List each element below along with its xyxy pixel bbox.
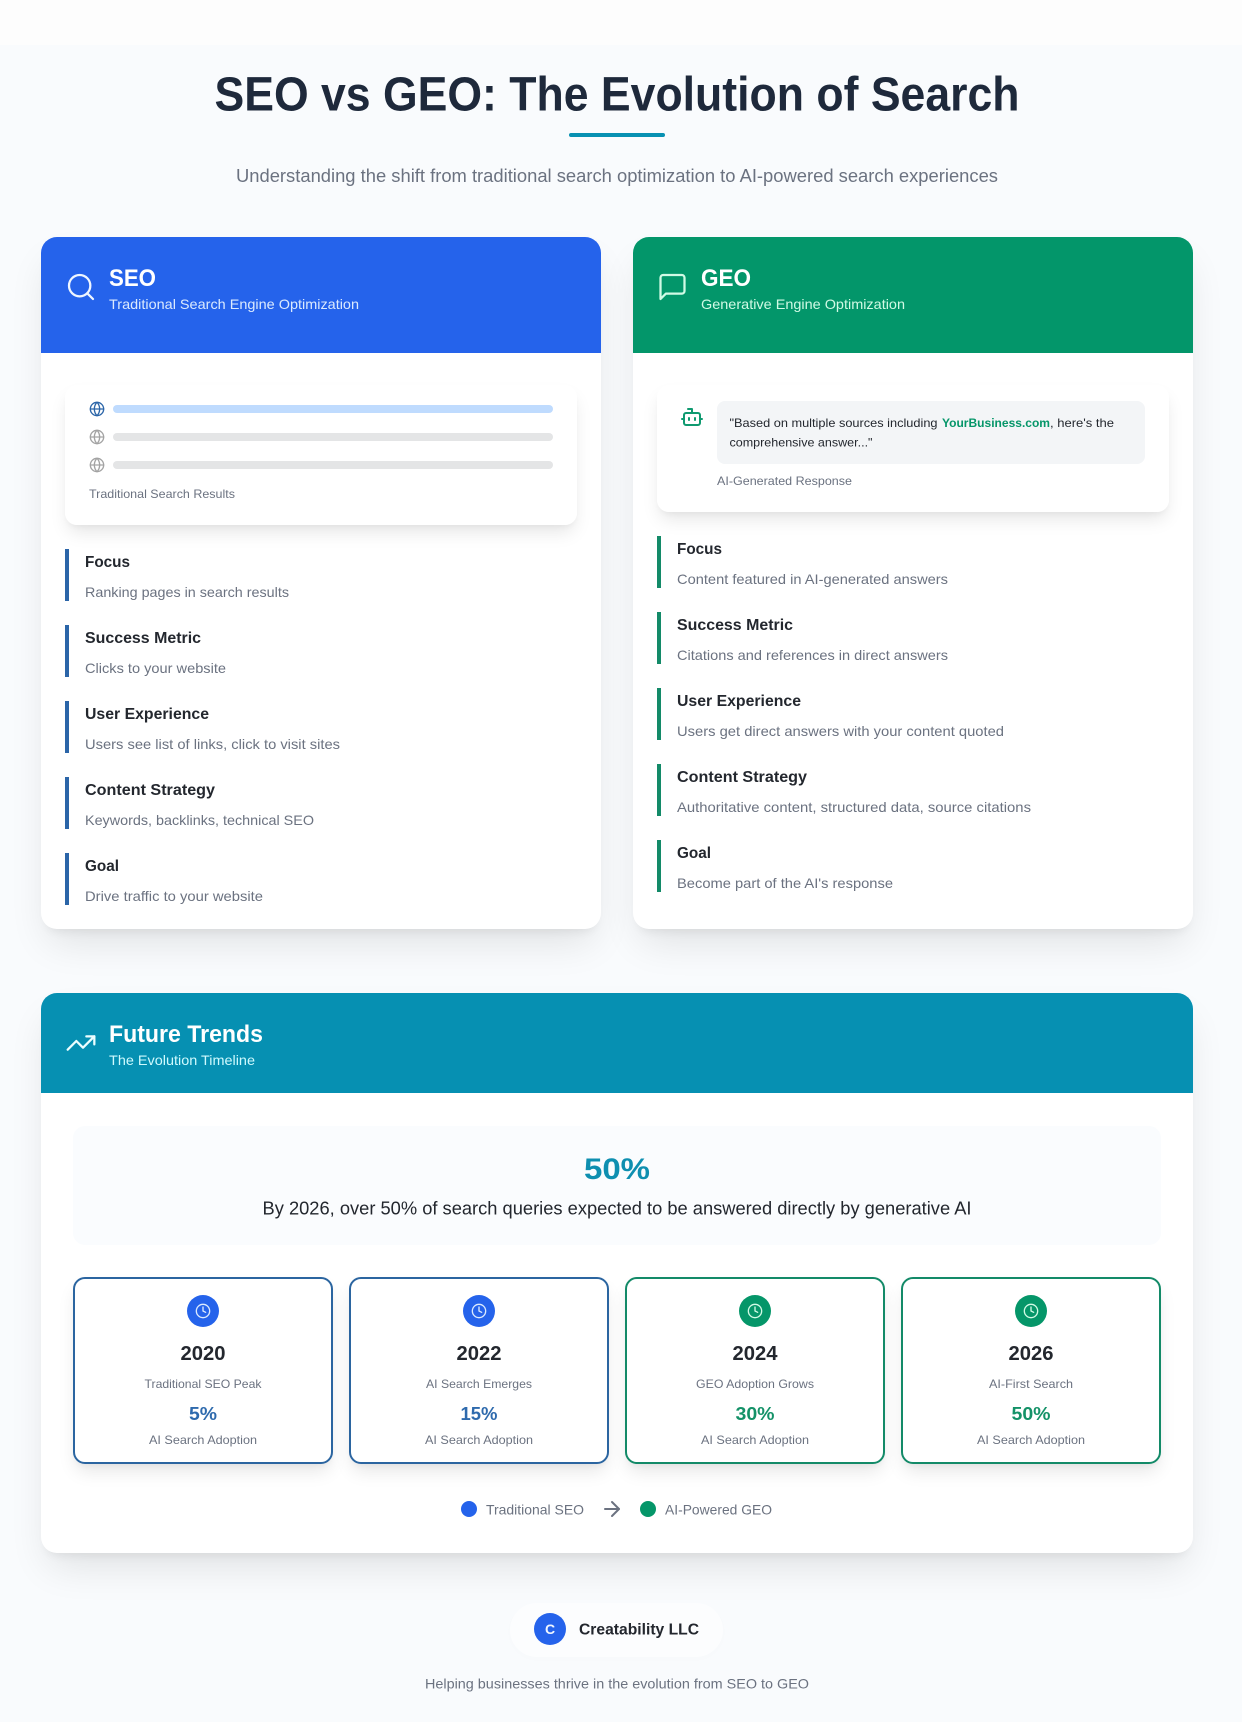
GEO item: user experience: Users get direct answers with your content quoted xyxy=(677,723,1004,739)
result bar xyxy=(113,461,553,469)
timeline card: 2022: 2022 xyxy=(456,1343,502,1365)
timeline card: 2024: 30% xyxy=(736,1404,774,1424)
icon: clock xyxy=(187,1295,219,1327)
icon: globe xyxy=(90,458,104,472)
GEO panel header xyxy=(633,237,1193,353)
GEO item: goal xyxy=(657,840,893,892)
GEO item: user experience xyxy=(657,688,1004,740)
SEO heading: SEO xyxy=(109,265,156,292)
legend xyxy=(461,1501,772,1518)
GEO subheading: Generative Engine Optimization xyxy=(701,296,905,312)
SEO item: goal: Drive traffic to your website xyxy=(85,888,263,904)
response quote: YourBusiness.com xyxy=(942,416,1050,430)
future trends header xyxy=(41,993,1193,1093)
icon: bot xyxy=(682,409,702,425)
response quote: "Based on multiple sources including xyxy=(730,416,938,430)
AI response mockup xyxy=(657,385,1169,512)
timeline card: 2020 xyxy=(74,1278,332,1463)
GEO item: goal: Goal xyxy=(677,845,711,862)
timeline card: 2022: AI Search Emerges xyxy=(426,1377,532,1391)
timeline card: 2020: AI Search Adoption xyxy=(149,1433,257,1447)
timeline card: 2024: AI Search Adoption xyxy=(701,1433,809,1447)
timeline card: 2020: Traditional SEO Peak xyxy=(144,1377,263,1391)
timeline card: 2026: AI-First Search xyxy=(989,1377,1073,1391)
mockup caption: Traditional Search Results xyxy=(89,487,235,501)
GEO item: content strategy: Content Strategy xyxy=(677,769,807,786)
statistic value: 50% xyxy=(584,1153,650,1186)
icon: clock xyxy=(463,1295,495,1327)
response bubble xyxy=(717,401,1145,464)
legend: AI-Powered GEO xyxy=(665,1502,772,1518)
SEO item: success metric: Clicks to your website xyxy=(85,660,226,676)
future trends subheading: The Evolution Timeline xyxy=(109,1052,255,1068)
arrow xyxy=(605,1502,619,1516)
SEO item: goal xyxy=(65,853,263,905)
SEO item: content strategy: Content Strategy xyxy=(85,782,215,799)
title: SEO vs GEO: The Evolution of Search xyxy=(214,68,1020,122)
GEO item: goal: Become part of the AI's response xyxy=(677,875,893,891)
GEO item: focus: Content featured in AI-generated answers xyxy=(677,571,948,587)
panel: SEO xyxy=(41,237,601,905)
footer tagline: Helping businesses thrive in the evolution from SEO to GEO xyxy=(425,1676,809,1692)
future trends heading: Future Trends xyxy=(109,1021,263,1048)
SEO item: focus: Ranking pages in search results xyxy=(85,584,289,600)
company badge: C xyxy=(545,1621,555,1637)
SEO item: user experience xyxy=(65,701,340,753)
timeline card: 2026: 50% xyxy=(1012,1404,1050,1424)
icon: message square xyxy=(660,275,684,299)
subtitle: Understanding the shift from traditional search optimization to AI-powered search experiences xyxy=(236,166,998,186)
legend: Traditional SEO xyxy=(486,1502,584,1518)
key statistic callout xyxy=(73,1126,1161,1245)
title accent bar xyxy=(569,133,665,137)
timeline card: 2024: 2024 xyxy=(732,1343,778,1365)
search results mockup xyxy=(65,385,577,525)
SEO item: user experience: User Experience xyxy=(85,706,209,723)
timeline card: 2024 xyxy=(626,1278,884,1463)
panel: future trends xyxy=(41,993,1193,1518)
panel: GEO xyxy=(633,237,1193,892)
response quote: comprehensive answer..." xyxy=(730,436,872,450)
GEO item: content strategy xyxy=(657,764,1031,816)
result bar xyxy=(113,433,553,441)
timeline card: 2020: 2020 xyxy=(180,1343,226,1365)
timeline card: 2022: AI Search Adoption xyxy=(425,1433,533,1447)
GEO item: focus: Focus xyxy=(677,541,722,558)
GEO item: content strategy: Authoritative content, structured data, source citations xyxy=(677,799,1031,815)
GEO heading: GEO xyxy=(701,265,751,292)
SEO item: user experience: Users see list of links, click to visit sites xyxy=(85,736,340,752)
icon: clock xyxy=(1015,1295,1047,1327)
SEO item: focus: Focus xyxy=(85,554,130,571)
timeline card: 2024: GEO Adoption Grows xyxy=(696,1377,814,1391)
GEO item: focus xyxy=(657,536,948,588)
SEO item: goal: Goal xyxy=(85,858,119,875)
company badge xyxy=(534,1613,699,1645)
GEO item: success metric: Success Metric xyxy=(677,617,793,634)
icon: globe xyxy=(90,430,104,444)
timeline card: 2022 xyxy=(350,1278,608,1463)
GEO item: user experience: User Experience xyxy=(677,693,801,710)
response quote: , here's the xyxy=(1050,416,1114,430)
page header xyxy=(214,68,1020,186)
icon: globe highlighted xyxy=(90,402,104,416)
mockup caption: AI-Generated Response xyxy=(717,474,852,488)
SEO item: content strategy: Keywords, backlinks, technical SEO xyxy=(85,812,314,828)
company badge: Creatability LLC xyxy=(579,1622,699,1638)
timeline card: 2026: 2026 xyxy=(1008,1343,1054,1365)
timeline card: 2026 xyxy=(902,1278,1160,1463)
SEO item: success metric xyxy=(65,625,226,677)
timeline card: 2026: AI Search Adoption xyxy=(977,1433,1085,1447)
icon: trending up xyxy=(68,1036,94,1050)
icon: clock xyxy=(739,1295,771,1327)
timeline card: 2020: 5% xyxy=(189,1404,217,1424)
footer xyxy=(425,1613,809,1692)
GEO item: success metric xyxy=(657,612,948,664)
SEO subheading: Traditional Search Engine Optimization xyxy=(109,296,359,312)
icon: search xyxy=(69,275,93,299)
highlighted result bar xyxy=(113,405,553,413)
SEO item: focus xyxy=(65,549,289,601)
SEO item: content strategy xyxy=(65,777,314,829)
statistic description: By 2026, over 50% of search queries expected to be answered directly by generative AI xyxy=(262,1198,972,1218)
SEO panel header xyxy=(41,237,601,353)
timeline card: 2022: 15% xyxy=(460,1404,498,1424)
GEO item: success metric: Citations and references in direct answers xyxy=(677,647,948,663)
SEO item: success metric: Success Metric xyxy=(85,630,201,647)
